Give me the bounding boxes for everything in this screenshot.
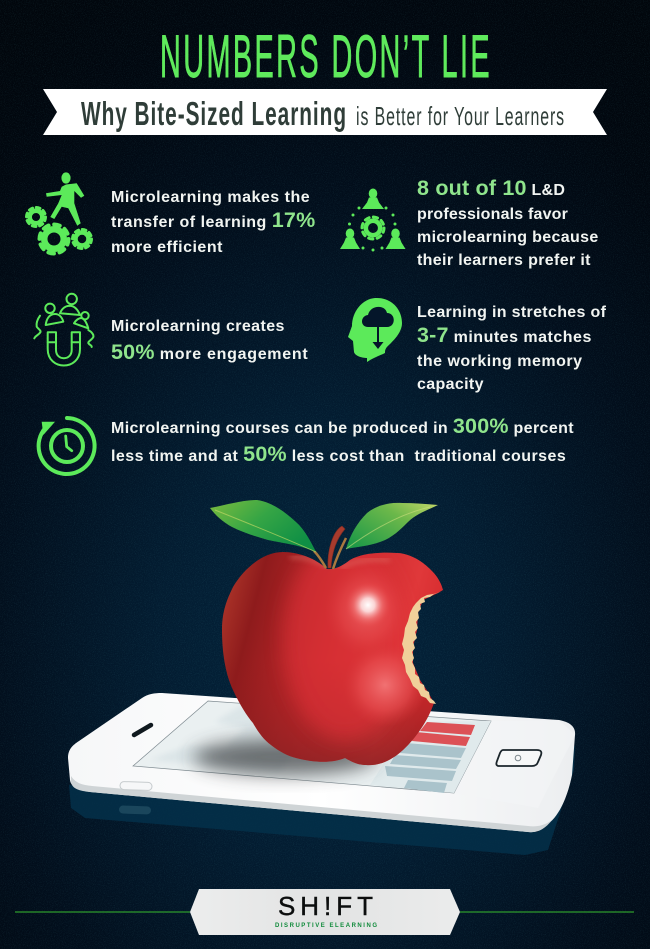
- text: transfer of learning: transfer of learning 17%: [111, 208, 315, 232]
- text: engagement: 50% more engagement: [111, 340, 308, 364]
- home button: [496, 750, 541, 766]
- text: transfer of learning: [111, 189, 315, 256]
- text: working memory: [417, 304, 607, 393]
- text: production time and cost: [111, 414, 574, 466]
- apple body: [222, 552, 443, 766]
- apple shadow: [193, 739, 377, 775]
- side button: [120, 781, 152, 791]
- text: working memory: the working memory: [417, 353, 582, 370]
- earpiece: [134, 725, 151, 735]
- icon: man walking on gears: [26, 172, 92, 254]
- text: working memory: capacity: [417, 376, 484, 393]
- icon: head with cloud download: [348, 298, 402, 362]
- text: engagement: [111, 318, 308, 364]
- text: engagement: Microlearning creates: [111, 318, 285, 335]
- subtitle ribbon: Why Bite-Sized Learning: [81, 95, 347, 132]
- phone reflection: [69, 745, 575, 855]
- apple: [210, 500, 450, 770]
- text: L&D professionals: their learners prefer it: [417, 252, 591, 269]
- SHIFT logo plate: SH!FT: [278, 891, 373, 921]
- SHIFT logo plate: [190, 889, 460, 935]
- text: working memory: Learning in stretches of: [417, 304, 607, 321]
- text: L&D professionals: [417, 176, 599, 269]
- smartphone: [68, 693, 575, 832]
- apple bite: [402, 592, 441, 704]
- subtitle ribbon: [43, 89, 607, 135]
- text: transfer of learning: Microlearning makes the: [111, 189, 310, 206]
- text: L&D professionals: 8 out of 10 L&D: [417, 176, 565, 200]
- icon: clock with circular arrow: [39, 418, 95, 474]
- text: production time and cost: less time and at 50% less cost than traditional courses: [111, 442, 566, 466]
- phone screen: [133, 701, 491, 793]
- icon: people and magnet: [34, 294, 93, 366]
- footer line: [15, 911, 634, 913]
- text: L&D professionals: professionals favor: [417, 206, 568, 223]
- icon: L&D team and gear: [340, 188, 406, 252]
- left leaf: [210, 500, 316, 552]
- SHIFT logo plate: DISRUPTIVE ELEARNING: [275, 923, 377, 929]
- text: production time and cost: Microlearning courses can be produced in 300% percent: [111, 414, 574, 438]
- text: working memory: 3-7 minutes matches: [417, 323, 592, 347]
- text: transfer of learning: more efficient: [111, 239, 223, 256]
- right leaf: [346, 503, 438, 549]
- apple stem: [328, 526, 345, 568]
- text: L&D professionals: microlearning because: [417, 229, 599, 246]
